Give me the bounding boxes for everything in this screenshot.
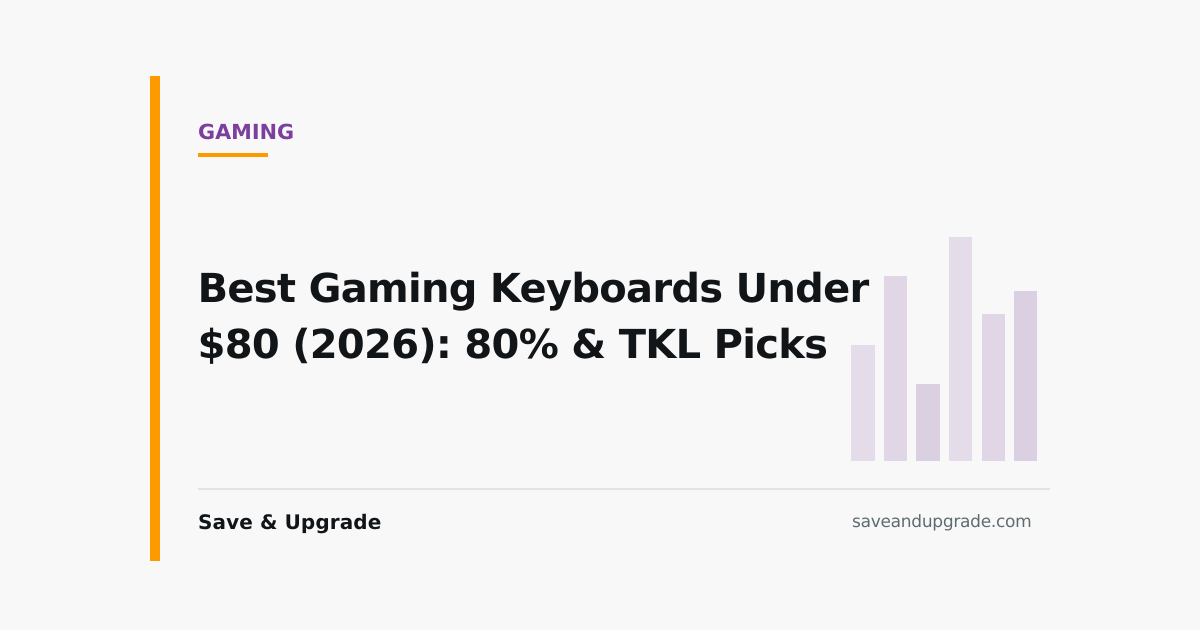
title <box>198 266 870 368</box>
decorative bar chart <box>851 237 1037 461</box>
bar 4 <box>949 237 972 461</box>
footer divider <box>198 488 1050 490</box>
bar 6 <box>1014 291 1037 461</box>
bar 5 <box>982 314 1005 461</box>
bar 2 <box>884 276 907 461</box>
website url: saveandupgrade.com <box>852 512 1031 532</box>
category underline <box>198 153 268 157</box>
bar 1 <box>851 345 875 461</box>
title: $80 (2026): 80% & TKL Picks <box>198 322 827 368</box>
category label: GAMING <box>198 120 294 144</box>
accent bar <box>150 76 160 561</box>
title: Best Gaming Keyboards Under <box>198 266 869 312</box>
brand name: Save & Upgrade <box>198 510 381 534</box>
bar 3 <box>916 384 940 461</box>
